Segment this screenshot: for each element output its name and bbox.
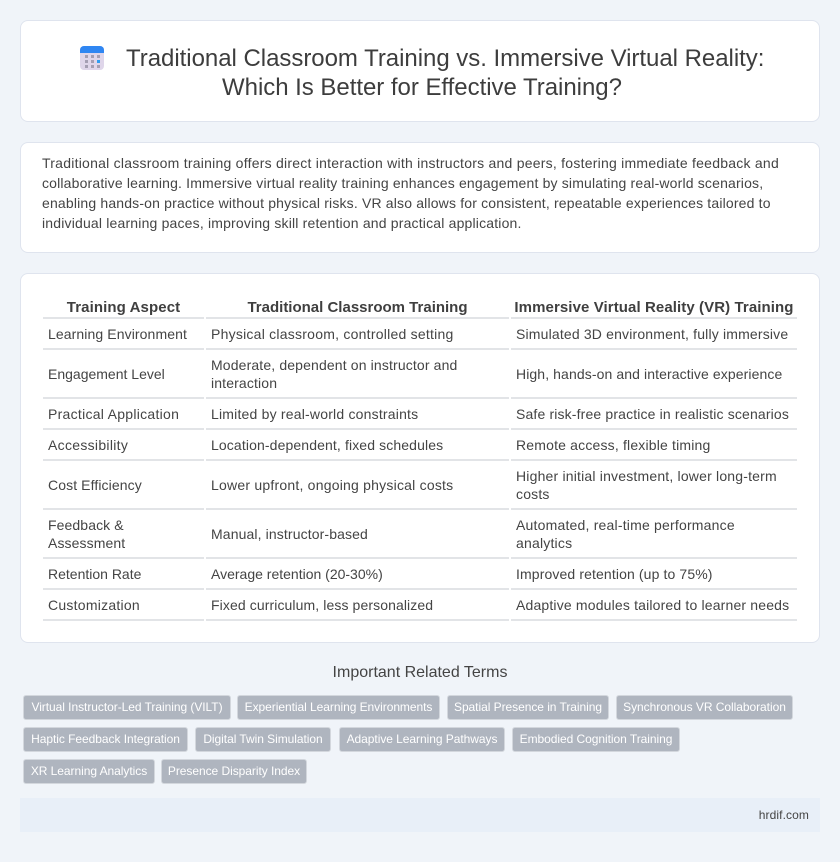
row: customization: Adaptive modules tailored to learner needs <box>516 597 789 613</box>
row: cost efficiency: Cost Efficiency <box>48 477 142 493</box>
intro text: collaborative learning. Immersive virtual reality training enhances engagement by simulating real-world scenarios, <box>42 175 763 191</box>
tag: Synchronous VR Collaboration <box>623 700 786 714</box>
row: retention rate: Retention Rate <box>48 566 141 582</box>
row: practical application <box>48 406 789 422</box>
row: feedback and assessment: Feedback & <box>48 517 124 533</box>
header: VR: Immersive Virtual Reality (VR) Training <box>514 299 794 316</box>
table panel <box>20 273 820 643</box>
tag <box>195 727 331 752</box>
row: learning environment <box>48 326 788 342</box>
intro text: enabling hands-on practice without physical risks. VR also allows for consistent, repeatable experiences tailored to <box>42 195 771 211</box>
row: cost efficiency: costs <box>516 486 550 502</box>
intro text: individual learning paces, improving skill retention and practical application. <box>42 215 522 231</box>
tag: Embodied Cognition Training <box>520 732 672 746</box>
intro panel <box>20 142 820 253</box>
row: cost efficiency <box>48 468 777 502</box>
tag: Adaptive Learning Pathways <box>347 732 497 746</box>
tag: Virtual Instructor-Led Training (VILT) <box>31 700 223 714</box>
footer text: source: hrdif.com <box>759 808 809 822</box>
tag <box>237 695 440 720</box>
tag <box>447 695 609 720</box>
tag <box>616 695 793 720</box>
intro text: Traditional classroom training offers direct interaction with instructors and peers, fostering immediate feedback and <box>42 155 779 171</box>
row: feedback and assessment: Manual, instructor-based <box>211 526 368 542</box>
tag: Digital Twin Simulation <box>203 732 323 746</box>
tag <box>161 759 307 784</box>
row: retention rate: Improved retention (up to 75%) <box>516 566 713 582</box>
row: feedback and assessment <box>48 517 735 551</box>
row: cost efficiency: Higher initial investment, lower long-term <box>516 468 777 484</box>
header panel <box>20 20 820 122</box>
title: Which Is Better for Effective Training? <box>222 74 622 101</box>
row: engagement level <box>48 357 782 391</box>
row: engagement level: High, hands-on and interactive experience <box>516 366 782 382</box>
header: training aspect: Training Aspect <box>67 299 180 316</box>
tags: related terms <box>23 695 793 784</box>
tag: Presence Disparity Index <box>168 764 300 778</box>
row: feedback and assessment: Automated, real-time performance <box>516 517 735 533</box>
row: engagement level: Engagement Level <box>48 366 165 382</box>
title <box>126 45 764 101</box>
footer bar <box>20 798 820 832</box>
title: Traditional Classroom Training vs. Immersive Virtual Reality: <box>126 45 764 72</box>
row: feedback and assessment: analytics <box>516 535 572 551</box>
row: customization: Fixed curriculum, less personalized <box>211 597 433 613</box>
tag <box>23 695 231 720</box>
row: accessibility: Remote access, flexible timing <box>516 437 710 453</box>
tag <box>339 727 505 752</box>
tag <box>512 727 680 752</box>
row: learning environment: Simulated 3D environment, fully immersive <box>516 326 788 342</box>
row: engagement level: interaction <box>211 375 277 391</box>
icon: calendar <box>80 46 104 70</box>
tag: XR Learning Analytics <box>31 764 147 778</box>
row: accessibility <box>48 437 710 453</box>
tag <box>23 759 155 784</box>
row: learning environment: Learning Environment <box>48 326 187 342</box>
tag: Spatial Presence in Training <box>454 700 602 714</box>
intro text <box>42 155 779 231</box>
row: practical application: Limited by real-world constraints <box>211 406 418 422</box>
row: customization: Customization <box>48 597 140 613</box>
row: accessibility: Accessibility <box>48 437 128 453</box>
tag: Experiential Learning Environments <box>245 700 432 714</box>
comparison table <box>43 299 797 621</box>
row: learning environment: Physical classroom, controlled setting <box>211 326 454 342</box>
row: accessibility: Location-dependent, fixed schedules <box>211 437 443 453</box>
row: retention rate: Average retention (20-30%) <box>211 566 383 582</box>
row: engagement level: Moderate, dependent on instructor and <box>211 357 457 373</box>
row: practical application: Practical Application <box>48 406 179 422</box>
tag <box>23 727 188 752</box>
row: cost efficiency: Lower upfront, ongoing physical costs <box>211 477 453 493</box>
tag: Haptic Feedback Integration <box>31 732 180 746</box>
related terms heading: Important Related Terms <box>333 664 507 681</box>
row: retention rate <box>48 566 713 582</box>
row: customization <box>48 597 789 613</box>
row: feedback and assessment: Assessment <box>48 535 125 551</box>
row: practical application: Safe risk-free practice in realistic scenarios <box>516 406 789 422</box>
header: traditional: Traditional Classroom Training <box>247 299 468 316</box>
